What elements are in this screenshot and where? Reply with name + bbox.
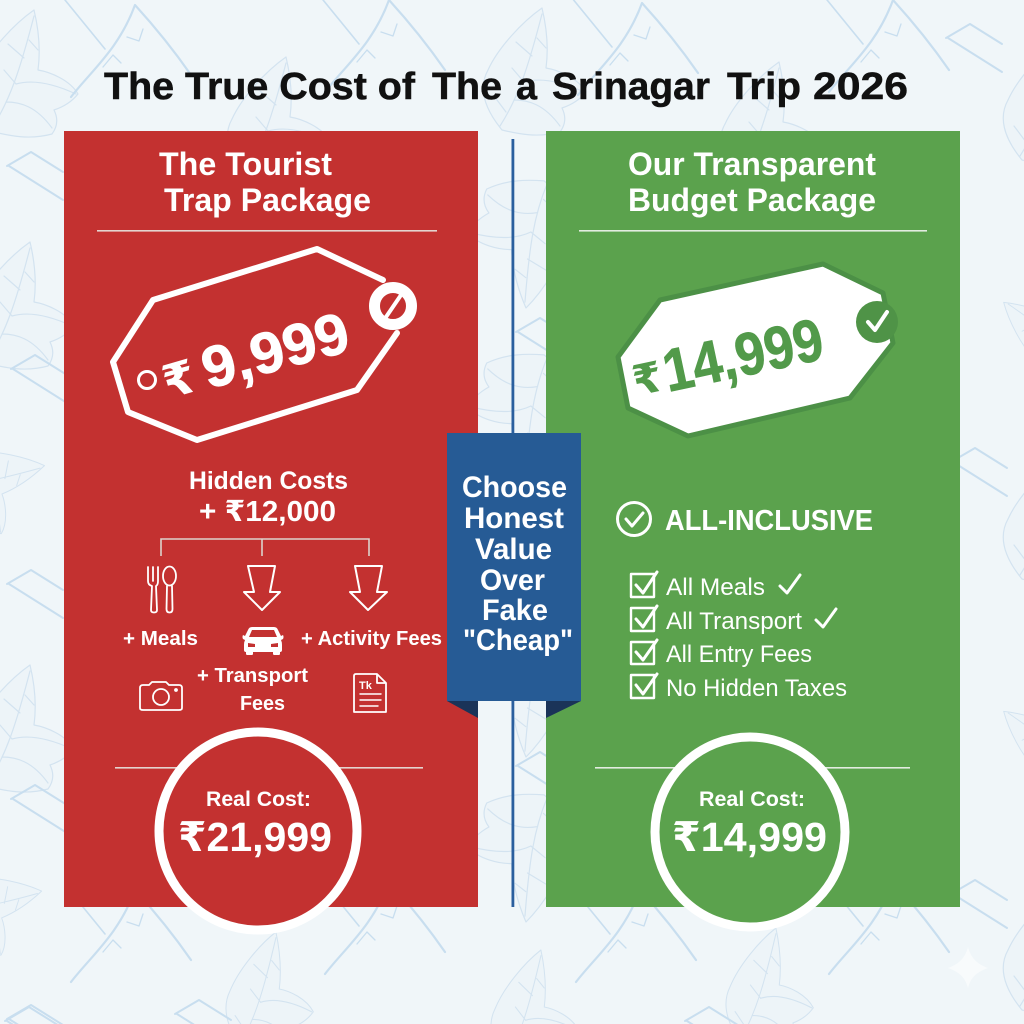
heading: transparent budget package (628, 146, 876, 218)
center banner: choose honest value: Fake (482, 594, 548, 627)
center banner: choose honest value (447, 433, 581, 718)
title: a (516, 66, 538, 108)
hidden costs total: Hidden Costs (189, 467, 348, 495)
all-inclusive heading: ALL-INCLUSIVE (665, 505, 873, 537)
heading: transparent budget package: Budget Package (628, 182, 876, 218)
item: all transport (631, 606, 836, 635)
hidden costs total: + ₹12,000 (199, 496, 336, 528)
icon: car (242, 627, 284, 655)
center banner: choose honest value: "Cheap" (463, 624, 573, 657)
bracket connector (161, 539, 369, 556)
item: all entry fees: All Entry Fees (666, 641, 812, 668)
icon: fork and spoon (148, 566, 176, 612)
item: all transport: All Transport (666, 608, 802, 635)
label: transport fees (197, 665, 308, 715)
center divider line (512, 139, 514, 907)
icon: camera (140, 682, 182, 710)
item: no hidden taxes: No Hidden Taxes (666, 675, 847, 702)
title (104, 66, 908, 108)
panel: transparent budget package (546, 131, 960, 907)
item: all meals (631, 572, 800, 601)
label: activity fees: + Activity Fees (301, 628, 442, 650)
title: The (432, 66, 502, 108)
real cost circle: budget package: Real Cost: (699, 788, 805, 811)
icon: down arrow (244, 566, 280, 610)
price tag: 14,999: 14,999 (657, 305, 829, 405)
hidden costs total (189, 467, 348, 528)
real cost circle: tourist trap (159, 732, 357, 930)
heading: transparent budget package: Our Transparent (628, 146, 876, 182)
real cost circle: tourist trap: Real Cost: (206, 788, 311, 811)
price tag: 9,999: ₹ (156, 350, 202, 409)
label: transport fees: + Transport (197, 665, 308, 687)
icon: tax document (354, 674, 386, 712)
icon: down arrow (350, 566, 387, 610)
price tag: 14,999 (618, 264, 898, 436)
label: meals: + Meals (123, 628, 198, 650)
item: all meals: All Meals (666, 574, 765, 601)
heading: tourist trap package: The Tourist (159, 146, 332, 182)
price tag: 9,999: 9,999 (195, 300, 356, 402)
center banner: choose honest value: Choose (462, 471, 567, 504)
title: 2026 (813, 66, 908, 108)
center banner: choose honest value: Value (475, 533, 552, 566)
icon: tax document: Tk (359, 680, 373, 692)
real cost circle: budget package (655, 737, 845, 927)
real cost circle: tourist trap: ₹21,999 (178, 814, 332, 860)
price tag: 9,999 (113, 249, 412, 440)
center banner: choose honest value: Over (480, 564, 545, 597)
heading: tourist trap package (159, 146, 371, 218)
heading: tourist trap package: Trap Package (164, 182, 371, 218)
real cost circle: budget package: ₹14,999 (672, 814, 827, 860)
label: transport fees: Fees (240, 693, 285, 715)
checklist: inclusions (631, 572, 847, 702)
panel: tourist trap package (64, 131, 478, 907)
title: Trip (727, 66, 801, 108)
title: Srinagar (552, 66, 710, 108)
price tag: 14,999: ₹ (628, 353, 666, 405)
center banner: choose honest value: Honest (464, 502, 564, 535)
title: The True Cost of (104, 66, 415, 108)
